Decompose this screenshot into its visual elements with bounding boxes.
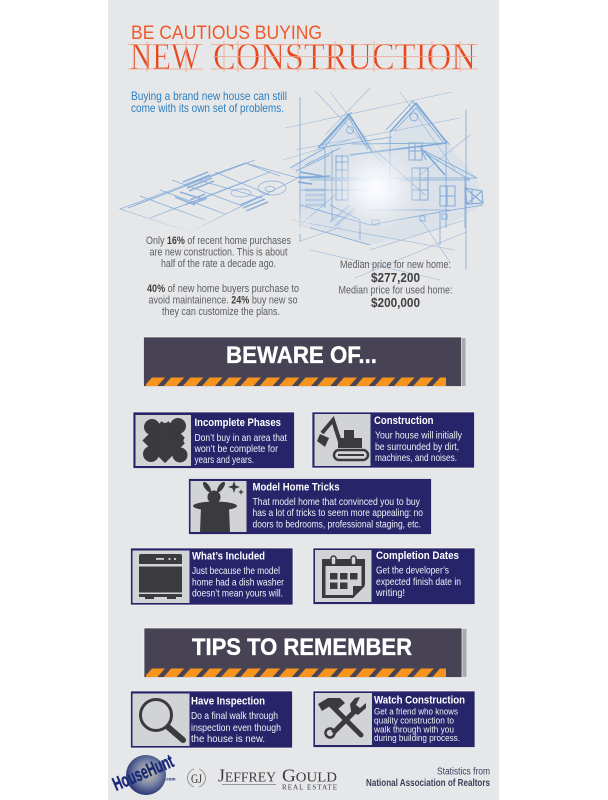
- card: incomplete phases: years and years.: [194, 455, 254, 466]
- logo: HouseHunt: HouseHunt: [110, 751, 177, 796]
- card: have inspection: Do a final walk through: [191, 711, 278, 722]
- card: completion dates: expected finish date in: [376, 577, 461, 588]
- logo: Jeffrey Gould Real Estate: GOULD: [282, 766, 337, 786]
- banner: tips to remember: TIPS TO REMEMBER: [192, 634, 412, 661]
- logo: GJ monogram: GJ: [191, 771, 202, 786]
- title line one: BE CAUTIOUS BUYING: [131, 23, 322, 44]
- statistics right: median prices: Median price for used home:: [338, 284, 452, 296]
- card: construction: [312, 412, 474, 468]
- card: watch construction: Watch Construction: [374, 694, 465, 706]
- blueprint glow: [326, 140, 426, 236]
- card: watch construction: walk through with you: [373, 724, 454, 734]
- card: completion dates: writing!: [375, 588, 405, 599]
- card: watch construction: quality construction to: [374, 716, 454, 726]
- statistics right: median prices: $200,000: [371, 296, 420, 310]
- statistics right: median prices: Median price for new home:: [340, 259, 451, 271]
- card: what's included: home had a dish washer: [192, 578, 285, 588]
- statistics left: 40% of new home buyers purchase to: [147, 283, 299, 295]
- statistics left: [146, 235, 299, 318]
- source credit: National Association of Realtors: [366, 778, 490, 789]
- icon: rabbit in hat: [193, 481, 244, 532]
- source credit: Statistics from: [437, 766, 490, 778]
- logo: Jeffrey Gould Real Estate: REAL ESTATE: [282, 784, 337, 792]
- statistics left: are new construction. This is about: [150, 246, 288, 258]
- title line two: [130, 36, 476, 78]
- card: model home tricks: That model home that convinced you to buy: [252, 497, 421, 508]
- card: what's included: [130, 548, 293, 605]
- banner: beware of: BEWARE OF...: [226, 342, 377, 369]
- card: incomplete phases: Incomplete Phases: [194, 417, 281, 429]
- intro text: [131, 90, 287, 115]
- logo: HouseHunt: [110, 751, 177, 796]
- intro text: Buying a brand new house can still: [131, 90, 287, 103]
- card: what's included: Just because the model: [192, 566, 280, 577]
- statistics left: Only 16% of recent home purchases: [146, 235, 291, 247]
- card: what's included: What’s Included: [192, 550, 265, 562]
- house frame: [290, 100, 483, 245]
- title line two: CONSTRUCTION: [213, 36, 476, 78]
- card: have inspection: inspection even though: [191, 723, 281, 734]
- card: incomplete phases: Don’t buy in an area that: [194, 433, 287, 444]
- icon: hammer and wrench: [318, 697, 366, 738]
- card: have inspection: Have Inspection: [191, 696, 265, 708]
- card: have inspection: the house is new.: [191, 734, 265, 745]
- title line two: NEW: [130, 36, 200, 78]
- card: completion dates: [313, 548, 475, 604]
- logo: Jeffrey Gould Real Estate: JEFFREY: [218, 766, 276, 786]
- card: what's included: doesn’t mean yours will.: [192, 588, 283, 600]
- statistics left: half of the rate a decade ago.: [161, 258, 276, 270]
- card: have inspection: [130, 691, 292, 748]
- house tint: [290, 103, 483, 245]
- statistics left: they can customize the plans.: [162, 306, 280, 318]
- card: watch construction: [313, 691, 475, 748]
- intro text: come with its own set of problems.: [131, 102, 284, 115]
- icon: excavator: [317, 420, 368, 460]
- card: model home tricks: has a lot of tricks to seem more appealing: no: [252, 508, 423, 519]
- card: construction: be surrounded by dirt,: [375, 442, 459, 453]
- banner: beware of: [144, 337, 466, 386]
- icon: calendar: [322, 556, 365, 598]
- construction lines: [283, 88, 470, 280]
- logo: GJ monogram: [188, 769, 205, 787]
- card: construction: Your house will initially: [375, 430, 463, 442]
- icon: oven: [139, 554, 182, 599]
- card: watch construction: Get a friend who knows: [374, 706, 458, 716]
- card: incomplete phases: [133, 412, 294, 468]
- logo: HouseHunt: .com: [165, 776, 176, 782]
- statistics right: median prices: [338, 259, 452, 310]
- floor plan fade: [110, 208, 310, 234]
- source credit: [366, 766, 490, 789]
- card: construction: Construction: [374, 415, 434, 427]
- logo: Jeffrey Gould Real Estate: [218, 766, 337, 792]
- banner: tips to remember: [144, 628, 466, 678]
- card: incomplete phases: won’t be complete for: [194, 444, 279, 455]
- card: model home tricks: [188, 478, 432, 534]
- title: [128, 23, 478, 78]
- background panel: [108, 0, 499, 800]
- statistics right: median prices: $277,200: [371, 271, 420, 285]
- card: model home tricks: doors to bedrooms, professional staging, etc.: [252, 520, 421, 530]
- floor plan: [120, 160, 298, 232]
- icon: magnifying glass: [140, 700, 183, 740]
- card: model home tricks: Model Home Tricks: [252, 482, 340, 494]
- blueprint house illustration: [120, 88, 483, 280]
- statistics left: avoid maintainence. 24% buy new so: [148, 294, 298, 306]
- card: watch construction: during building process.: [374, 733, 460, 743]
- card: construction: machines, and noises.: [375, 453, 457, 464]
- card: completion dates: Get the developer’s: [376, 566, 449, 576]
- card: completion dates: Completion Dates: [376, 550, 459, 562]
- icon: puzzle piece: [142, 416, 190, 463]
